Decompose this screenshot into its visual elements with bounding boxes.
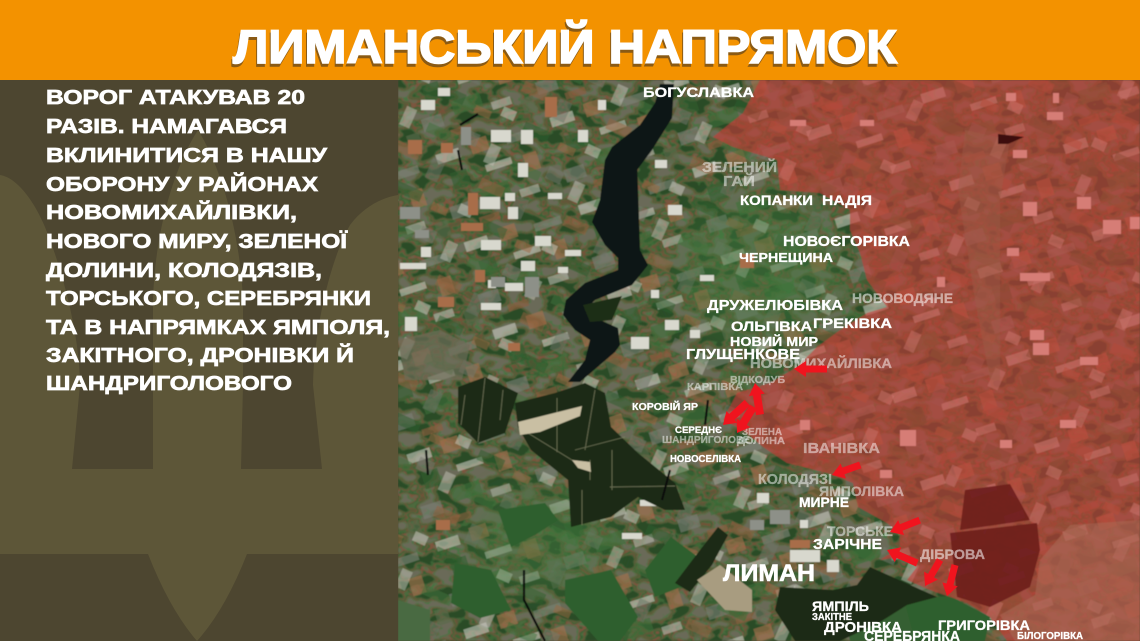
map: town west — [398, 330, 470, 380]
arrow: Kolodiazi — [829, 457, 863, 483]
text block: attack summary: ВОРОГ АТАКУВАВ 20 — [46, 87, 305, 109]
label: Зелена: ЗЕЛЕНА — [742, 427, 782, 438]
label: Греківка: ГРЕКІВКА — [813, 315, 892, 331]
label: Карпівка: КАРПІВКА — [687, 382, 743, 393]
arrow: Serebrianka north — [918, 556, 947, 590]
label: Середнє: СЕРЕДНЄ — [675, 425, 722, 436]
text block: attack summary: ДОЛИНИ, КОЛОДЯЗІВ, — [46, 260, 322, 282]
map: dark forests — [458, 155, 937, 641]
arrow: Novomykhailivka — [794, 361, 827, 377]
label: Дронівка: ДРОНІВКА — [824, 619, 902, 636]
arrow: Zelena Dolyna — [730, 402, 760, 437]
label: Нововодяне: НОВОВОДЯНЕ — [852, 290, 953, 306]
map: bright fields west — [400, 88, 839, 572]
label: Діброва: ДІБРОВА — [920, 546, 985, 562]
label: Гай: ГАЙ — [723, 172, 755, 190]
map: broad green zones — [470, 200, 840, 590]
text block: attack summary: НОВОГО МИРУ, ЗЕЛЕНОЇ — [46, 230, 348, 253]
label: Новоєгорівка: НОВОЄГОРІВКА — [783, 234, 911, 250]
label: Коровій Яр: КОРОВІЙ ЯР — [632, 400, 698, 413]
label: Новомихайлівка: НОВОМИХАЙЛІВКА — [750, 354, 892, 371]
map labels — [632, 84, 1083, 641]
panel: left text panel — [0, 130, 398, 641]
icon: trident emblem watermark — [0, 130, 398, 641]
label: Григорівка: ГРИГОРІВКА — [938, 617, 1030, 633]
label: Ямпіль: ЯМПІЛЬ — [812, 598, 869, 614]
arrows: enemy attacks — [718, 361, 963, 598]
label: Лиман: ЛИМАН — [723, 560, 815, 587]
label: Копанки: КОПАНКИ — [740, 192, 813, 208]
map: pale fields in occupied zone — [790, 93, 1140, 478]
label: Богуславка: БОГУСЛАВКА — [643, 84, 754, 100]
label: Відкодуб: ВІДКОДУБ — [730, 375, 785, 386]
map: terracotta fields — [408, 97, 810, 548]
map: occupied zone brown south-east — [1000, 520, 1140, 641]
arrow: Torske — [887, 513, 923, 539]
text block: attack summary: НОВОМИХАЙЛІВКИ, — [46, 200, 297, 224]
label: Дружелюбівка: ДРУЖЕЛЮБІВКА — [707, 297, 843, 314]
title: ЛИМАНСЬКИЙ НАПРЯМОК — [233, 20, 897, 73]
arrow: Zarichne — [884, 543, 920, 570]
label: Глущенкове: ГЛУЩЕНКОВЕ — [686, 346, 800, 363]
map: forest clearings — [461, 378, 675, 525]
arrow: Serednie — [718, 397, 753, 431]
text block: attack summary — [46, 87, 390, 395]
text block: attack summary: ШАНДРИГОЛОВОГО — [46, 373, 292, 395]
map: occupied zone town strip — [958, 130, 1010, 380]
label: Торське: ТОРСЬКЕ — [827, 524, 893, 539]
text block: attack summary: ЗАКІТНОГО, ДРОНІВКИ Й — [46, 343, 354, 367]
map: field parcels B — [398, 80, 1140, 641]
label: Шандриголове: ШАНДРИГОЛОВЕ — [662, 434, 750, 446]
text block: attack summary: ОБОРОНУ У РАЙОНАХ — [46, 172, 319, 196]
map: sand quarries — [518, 406, 752, 612]
text block: attack summary: ТОРСЬКОГО, СЕРЕБРЯНКИ — [46, 288, 371, 310]
map: farmland base — [398, 80, 1140, 641]
label: Зелений: ЗЕЛЕНИЙ — [702, 158, 777, 176]
map panel — [398, 80, 1140, 641]
label: Колодязі: КОЛОДЯЗІ — [758, 472, 832, 488]
arrow: Vidkodub — [747, 382, 768, 416]
label: Мирне: МИРНЕ — [799, 494, 849, 510]
text block: attack summary: ВКЛИНИТИСЯ В НАШУ — [46, 145, 328, 167]
label: Надія: НАДІЯ — [822, 192, 872, 208]
label: Іванівка: ІВАНІВКА — [803, 440, 880, 457]
map: occupied zone forests — [950, 484, 1040, 607]
label: Новоселівка: НОВОСЕЛІВКА — [670, 454, 741, 465]
map: occupied pond — [998, 134, 1024, 144]
label: Закітне: ЗАКІТНЕ — [812, 612, 852, 623]
label: Ольгівка: ОЛЬГІВКА — [731, 318, 812, 334]
label: Долина: ДОЛИНА — [737, 436, 785, 447]
label: Новий Мир: НОВИЙ МИР — [730, 334, 818, 349]
text block: attack summary: ТА В НАПРЯМКАХ ЯМПОЛЯ, — [46, 317, 390, 339]
map: field parcels A — [398, 80, 1140, 641]
map: occupied territory overlay — [713, 80, 1140, 641]
text block: attack summary: РАЗІВ. НАМАГАВСЯ — [46, 116, 287, 138]
header bar — [0, 0, 1140, 80]
arrow: Serebrianka south — [939, 563, 963, 598]
map: green forests — [398, 503, 990, 641]
map: small ponds — [426, 114, 708, 641]
label: Чернещина: ЧЕРНЕЩИНА — [739, 250, 834, 265]
label: Ямполівка: ЯМПОЛІВКА — [819, 483, 904, 499]
map: reservoir river — [563, 84, 674, 382]
map: terrain imagery — [398, 80, 1140, 641]
map: river islands — [583, 296, 622, 322]
map: grey fields — [400, 127, 790, 530]
label: Зарічне: ЗАРІЧНЕ — [813, 536, 882, 553]
